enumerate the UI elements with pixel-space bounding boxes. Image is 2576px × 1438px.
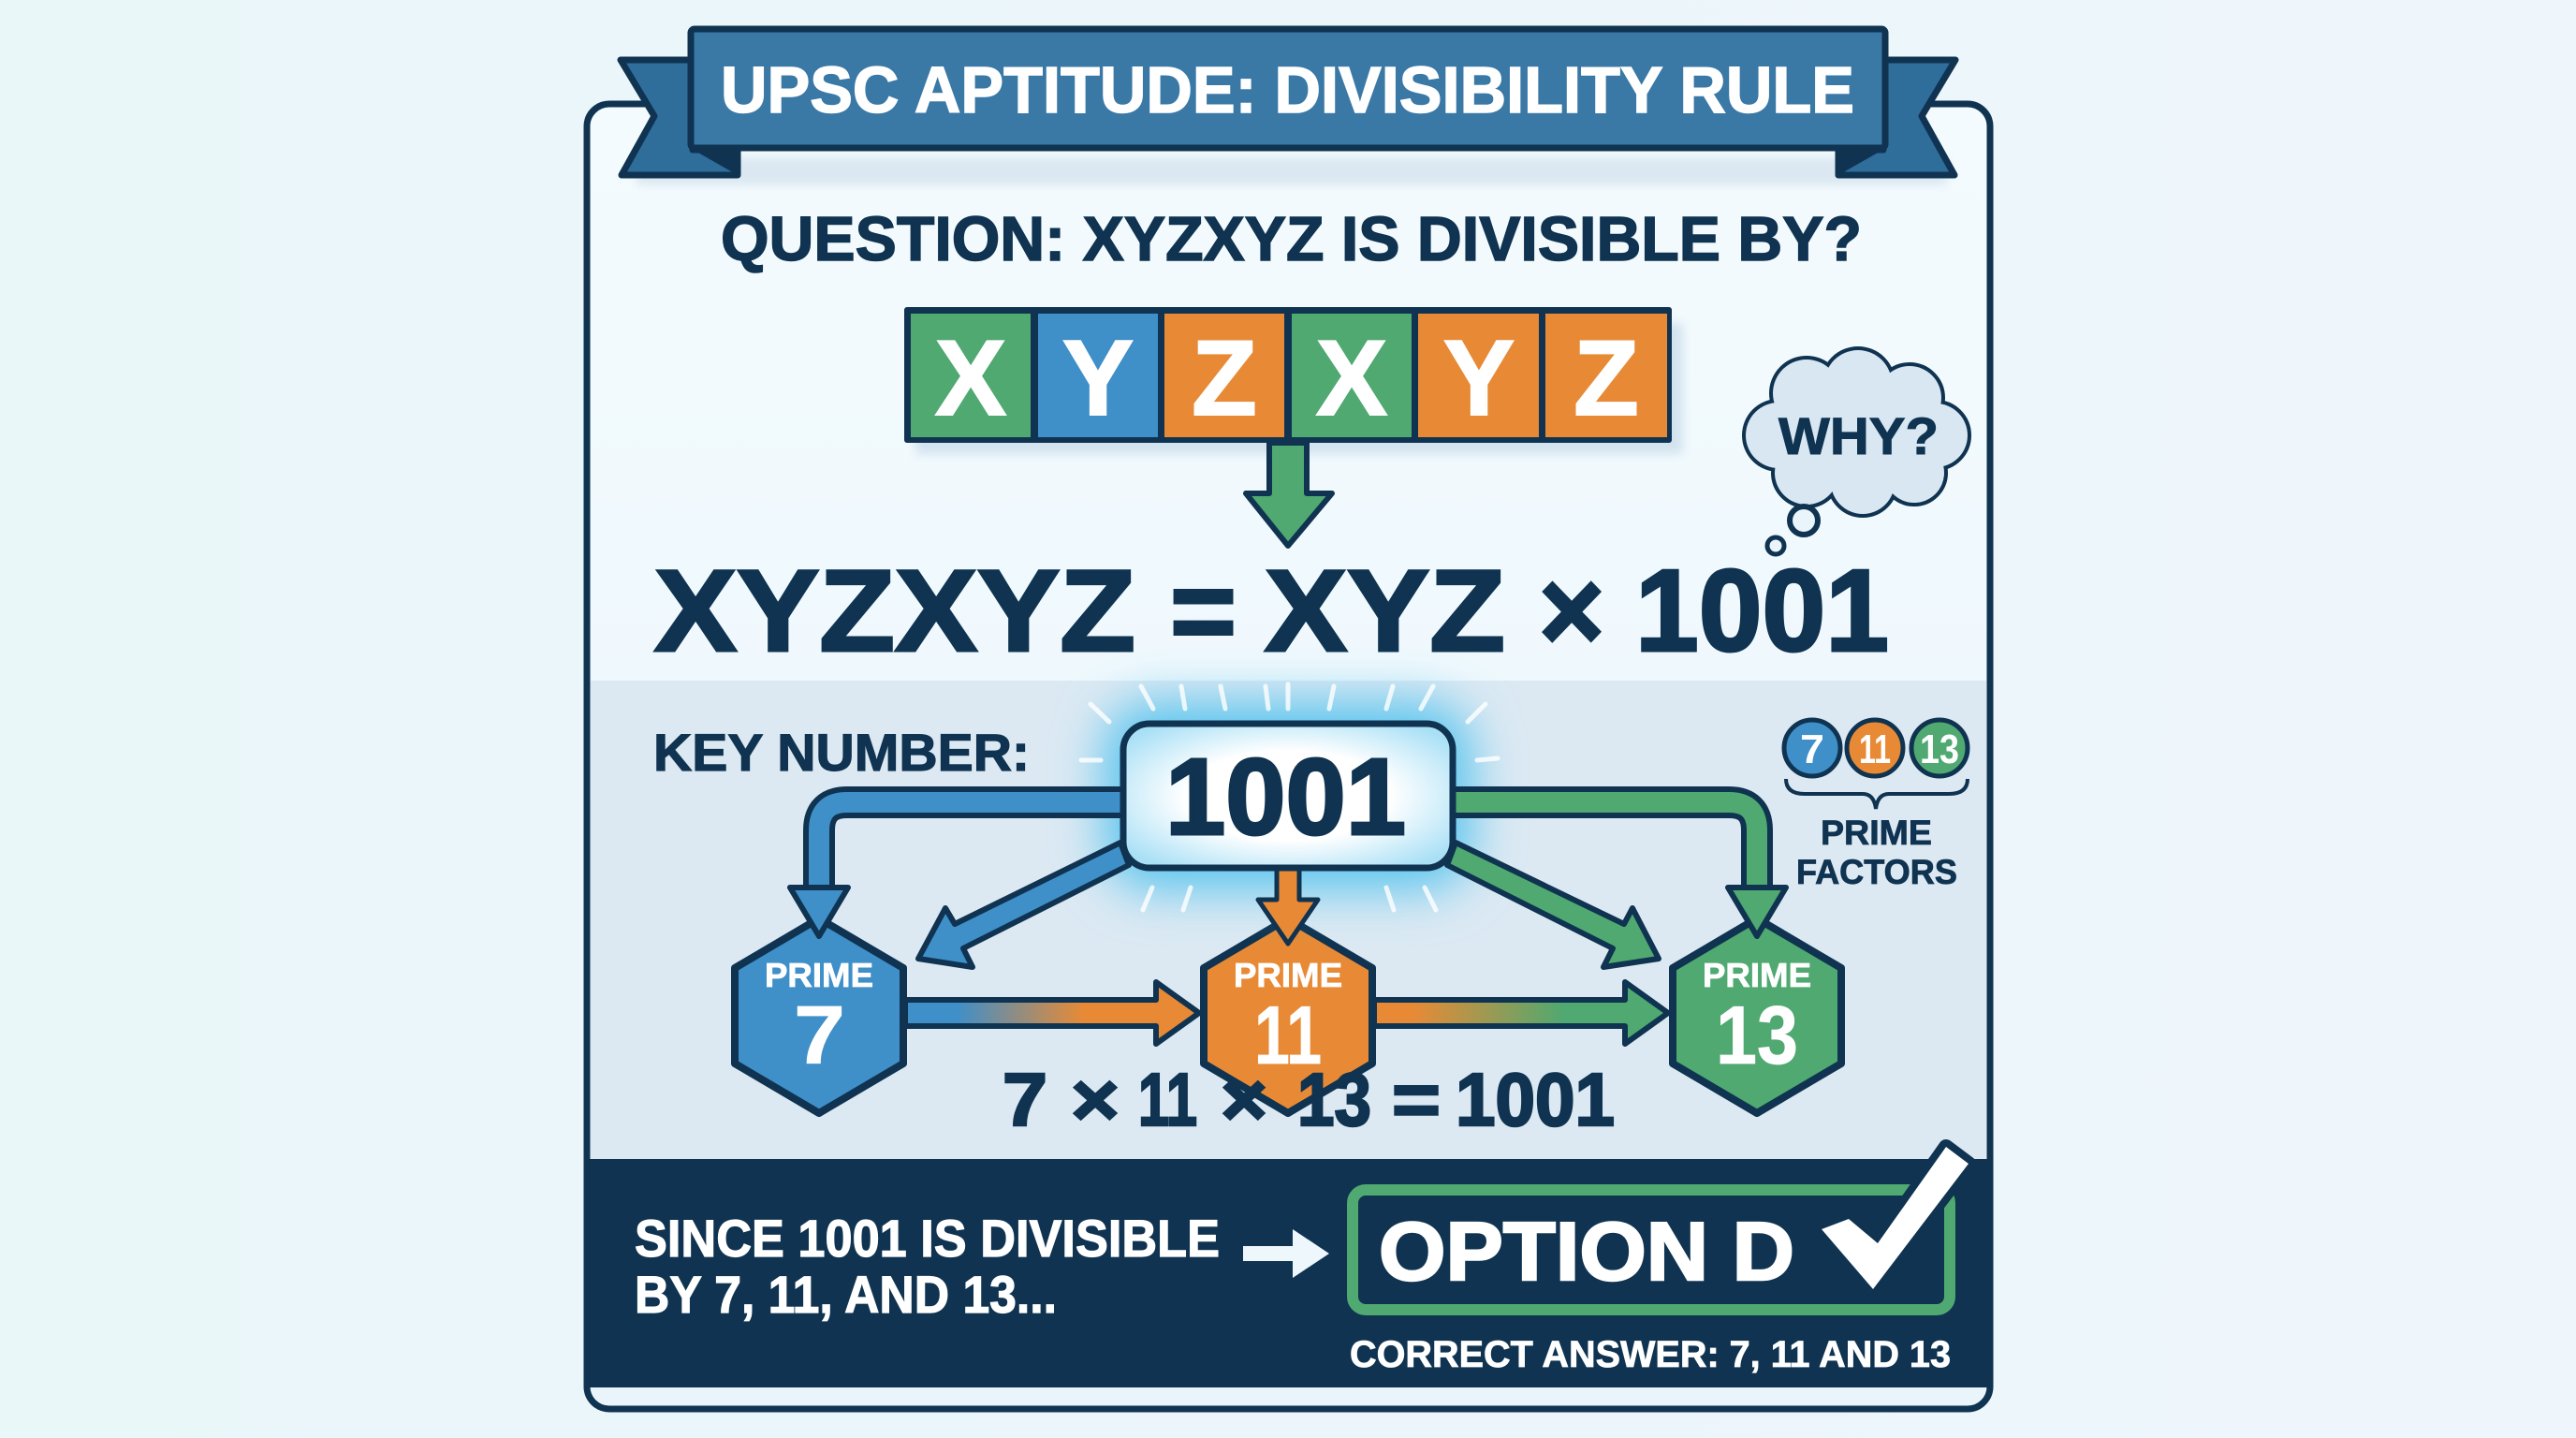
product equation: 11 <box>1138 1058 1197 1141</box>
product equation: 13 <box>1297 1058 1371 1141</box>
product equation: 1001 <box>1456 1058 1615 1141</box>
main equation: XYZXYZ <box>654 547 1135 676</box>
question heading: QUESTION: XYZXYZ IS DIVISIBLE BY? <box>721 204 1862 274</box>
arrow to answer <box>1243 1229 1329 1278</box>
right ribbon tail <box>1838 60 1955 175</box>
hexagon labels: PRIME <box>1234 956 1342 994</box>
correct answer text: CORRECT ANSWER: 7, 11 AND 13 <box>1350 1334 1951 1375</box>
tile letters: Z <box>1573 319 1639 438</box>
banner <box>621 29 1955 185</box>
answer box <box>1353 1190 1950 1310</box>
left fold <box>690 148 738 175</box>
tile letters: X <box>935 319 1006 438</box>
legend label: PRIME <box>1821 814 1932 852</box>
panel: key number background <box>591 681 1986 1160</box>
hexagon 7 <box>735 918 903 1113</box>
prime factors legend <box>1784 720 1968 891</box>
answer text: OPTION D <box>1379 1205 1794 1298</box>
cloud text: WHY? <box>1778 406 1939 465</box>
tiles outline <box>904 307 1672 443</box>
prime hexagons <box>735 918 1841 1113</box>
tile Y <box>1418 314 1539 437</box>
banner body <box>691 29 1885 148</box>
legend circle 7 <box>1784 720 1840 776</box>
product equation: × <box>1221 1058 1267 1141</box>
product equation: × <box>1071 1058 1120 1141</box>
card frame <box>587 104 1990 1409</box>
hexagon labels: 7 <box>794 989 845 1081</box>
light rays <box>1081 684 1498 910</box>
letter tiles <box>904 307 1683 454</box>
checkmark <box>1822 1147 1969 1289</box>
hexagon labels: PRIME <box>765 956 873 994</box>
diagonal arrow to 7 <box>918 843 1129 967</box>
product equation <box>1003 1058 1615 1141</box>
arrow to 7 <box>790 802 1128 936</box>
arrows from key number <box>790 802 1786 967</box>
hexagon labels: 11 <box>1254 989 1322 1081</box>
thought cloud <box>1746 350 1968 554</box>
hexagon labels: PRIME <box>1703 956 1811 994</box>
prime factors legend: FACTORS <box>1796 853 1957 891</box>
left ribbon tail <box>621 60 738 175</box>
cloud fill <box>1746 350 1968 514</box>
main equation: 1001 <box>1635 547 1889 676</box>
tile Y <box>1038 314 1158 437</box>
conclusion text: SINCE 1001 IS DIVISIBLE <box>635 1209 1220 1268</box>
hexagon 11 <box>1204 918 1372 1113</box>
panel: conclusion <box>585 1147 1992 1387</box>
hexagon labels <box>765 956 1811 1081</box>
arrow: 7 to 11 <box>905 982 1199 1044</box>
product equation: = <box>1392 1058 1441 1141</box>
tile Z <box>1545 314 1667 437</box>
hexagon 13 <box>1673 918 1841 1113</box>
thought bubble large <box>1790 506 1818 535</box>
tile letters <box>935 319 1639 438</box>
right fold <box>1838 148 1886 175</box>
main equation: = <box>1170 547 1237 676</box>
key number panel <box>1123 724 1453 868</box>
tile X <box>911 314 1031 437</box>
legend numbers: 13 <box>1920 726 1959 772</box>
legend brace <box>1786 779 1968 809</box>
glow behind key number <box>1105 702 1471 889</box>
product equation: 7 <box>1003 1058 1047 1141</box>
arrow to 13 <box>1448 802 1786 936</box>
legend numbers: 7 <box>1800 726 1824 772</box>
title: UPSC APTITUDE: DIVISIBILITY RULE <box>721 53 1854 126</box>
main equation: XYZ <box>1265 547 1505 676</box>
diagonal arrow to 13 <box>1447 843 1659 967</box>
tiles shadow <box>915 323 1683 454</box>
legend numbers: 11 <box>1859 726 1891 772</box>
main equation <box>654 547 1889 676</box>
tile letters: Z <box>1192 319 1257 438</box>
legend circle 13 <box>1911 720 1968 776</box>
key number value: 1001 <box>1165 736 1406 858</box>
tile letters: Y <box>1062 319 1134 438</box>
hexagon labels: 13 <box>1716 989 1798 1081</box>
tile Z <box>1164 314 1284 437</box>
legend circle 11 <box>1847 720 1903 776</box>
key number box <box>1123 724 1453 868</box>
conclusion background <box>585 1159 1992 1387</box>
panel: conclusion: BY 7, 11, AND 13... <box>635 1265 1057 1324</box>
arrow to 11 <box>1258 869 1318 944</box>
arrow: tiles to equation <box>1246 443 1332 546</box>
tile letters: X <box>1316 319 1387 438</box>
arrow: 11 to 13 <box>1374 982 1668 1044</box>
main equation: × <box>1539 547 1604 676</box>
thought bubble small <box>1767 537 1784 554</box>
legend numbers <box>1800 726 1959 772</box>
cloud outline <box>1746 350 1968 514</box>
tile X <box>1292 314 1412 437</box>
key number label: KEY NUMBER: <box>653 723 1030 782</box>
banner shadow <box>637 157 1947 185</box>
tile letters: Y <box>1443 319 1515 438</box>
